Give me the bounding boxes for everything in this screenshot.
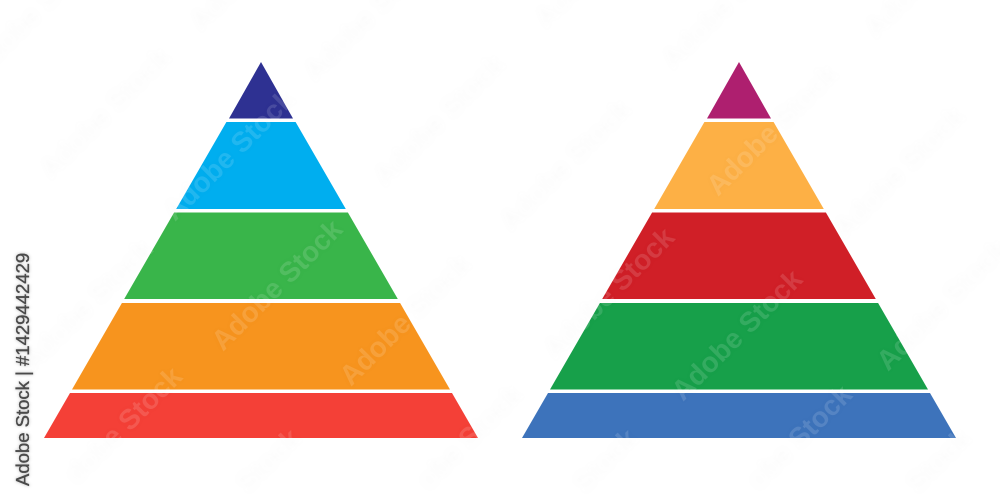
pyramid: right, warm to blue <box>522 62 956 438</box>
pyramid: left, cool to warm <box>44 62 478 438</box>
watermarks: Adobe Stock: Adobe Stock <box>15 233 159 376</box>
watermarks: Adobe Stock: Stock <box>900 422 976 498</box>
watermarks: Adobe Stock: Adobe Stock <box>700 58 844 201</box>
tier 1: magenta apex <box>707 62 771 118</box>
watermarks: Adobe Stock: Adobe Stock <box>157 83 301 226</box>
tier 4: dark green <box>550 303 928 390</box>
side credit: stock id: Adobe Stock | #1429442429 <box>12 253 33 486</box>
watermarks: Adobe Stock: Stock <box>230 422 306 498</box>
tier 2: sky blue <box>176 122 346 209</box>
watermarks: Adobe Stock: Adobe Stock <box>537 221 681 364</box>
tier 2: light orange <box>654 122 824 209</box>
watermarks: Adobe Stock: dobe Stock <box>59 360 188 489</box>
watermarks: Adobe Stock: Adobe Stock <box>665 263 809 406</box>
watermarks: Adobe Stock: Adobe Stock <box>827 100 971 243</box>
tier 3: green <box>124 212 398 299</box>
watermarks: Adobe Stock: obe Stock <box>411 378 528 495</box>
watermarks: Adobe Stock: Adobe Stock <box>333 248 477 391</box>
tier 4: orange <box>72 303 450 390</box>
watermarks: Adobe Stock: Adobe Stock <box>493 93 637 236</box>
watermarks: Adobe Stock: obe Stock <box>741 378 858 495</box>
watermarks: Adobe Stock: Stock <box>567 422 643 498</box>
tier 5: red <box>44 393 478 438</box>
watermarks: Adobe Stock: Adobe Stock <box>33 41 177 184</box>
tier 5: steel blue <box>522 393 956 438</box>
watermarks: Adobe Stock: Adobe Stock <box>367 48 511 191</box>
tier 1: navy apex <box>229 62 293 118</box>
tier 3: crimson <box>602 212 876 299</box>
watermarks: Adobe Stock: Adobe Stock <box>205 213 349 356</box>
